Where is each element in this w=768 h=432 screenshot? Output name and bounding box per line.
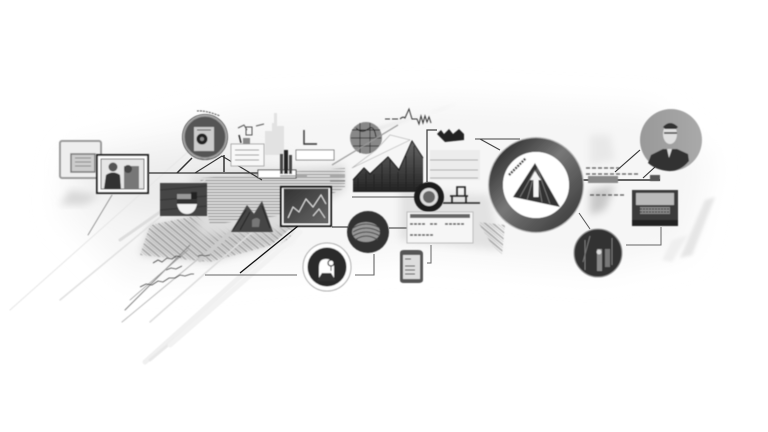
icon: portrait circle <box>640 109 702 171</box>
chart: framed line chart <box>281 187 331 226</box>
panel: sketched document and skyline <box>231 113 284 166</box>
icon: dark photo with capsule <box>160 183 207 216</box>
icon: dark scene circle <box>574 229 622 277</box>
handwritten notes lower left <box>140 255 210 287</box>
panel: bar sketch with document <box>258 130 345 181</box>
icon: silhouette machinery <box>437 129 480 203</box>
icon: portrait photo frame <box>97 155 148 193</box>
sketched background wash <box>60 100 715 280</box>
panel: document with rows <box>407 150 480 243</box>
diagonal pencil strokes <box>10 150 300 362</box>
icon: gray back frame <box>60 141 101 178</box>
icon: vehicle wheel <box>414 182 444 212</box>
caption scribble: photo frame <box>121 197 137 199</box>
chart: large mountain area chart <box>332 125 423 192</box>
icon: circle camera <box>182 111 228 160</box>
connector lines <box>149 130 661 275</box>
panel: sketched connector band <box>586 168 660 195</box>
icon: coil circle <box>347 211 389 253</box>
icon: large ring with arrow triangle <box>488 138 584 232</box>
caption scribble: mountain <box>233 238 250 240</box>
icon: globe circle <box>350 122 382 154</box>
handwritten scribble above chart <box>385 109 431 124</box>
icon: mountain <box>231 201 273 232</box>
icon: bottle <box>400 250 423 283</box>
icon: location pin circle <box>303 243 351 291</box>
icon: dark dashboard panel <box>632 190 678 226</box>
